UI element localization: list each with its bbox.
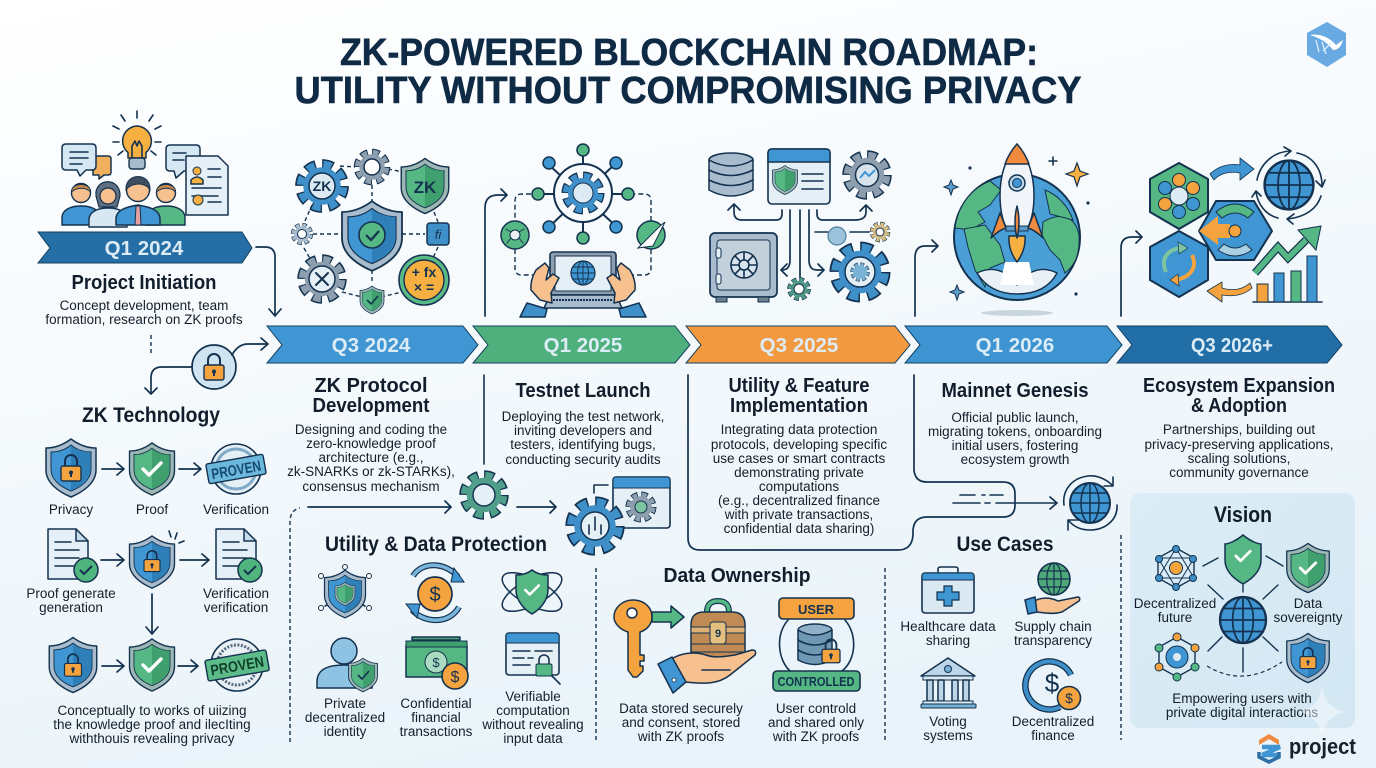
text: ecosystem description: privacy-preserving applications, — [1144, 437, 1334, 452]
text: ecosystem description: Partnerships, building out — [1163, 422, 1315, 437]
text: mainnet description: ecosystem growth — [961, 452, 1069, 467]
icon: ZK protocol gears and shields: fi — [435, 227, 442, 242]
text: utility description: computations — [759, 479, 839, 494]
heading: ZK Protocol Development: ZK Protocol — [314, 375, 428, 397]
icon: healthcare kit — [922, 567, 974, 613]
arrow: to ecosystem illustration — [1121, 231, 1142, 316]
ribbon: Q3 2024 — [267, 326, 478, 363]
heading: Use Cases: Use Cases — [956, 533, 1054, 556]
text: utility description: use cases or smart contracts — [713, 451, 886, 466]
labels: use cases first row: transparency — [1014, 633, 1092, 648]
text: ZK technology caption: Conceptually to works of uiizing — [57, 703, 247, 718]
ribbon: Q3 2024: Q3 2024 — [332, 334, 411, 357]
heading: Ecosystem Expansion and Adoption — [1143, 375, 1335, 417]
title: ZK-POWERED BLOCKCHAIN ROADMAP: — [340, 32, 1038, 74]
text: testnet description: Deploying the test network, — [502, 409, 664, 424]
logo: project: project — [1289, 734, 1357, 759]
text: ZK technology caption: the knowledge proof and ilecIting — [53, 717, 251, 732]
labels: second row: Verification — [203, 586, 269, 601]
labels: utility icons: Private — [324, 696, 366, 711]
ribbon: Q3 2026+ — [1117, 326, 1342, 363]
labels: utility icons: identity — [324, 724, 367, 739]
ribbon: Q1 2024 — [38, 232, 252, 263]
text: protocol description: Designing and coding the — [295, 422, 447, 437]
labels: decentralized future and data sovereignty: future — [1158, 610, 1192, 625]
icon: hand holding globe — [1025, 563, 1080, 614]
labels: data ownership: Data stored securely — [619, 701, 743, 716]
text: utility description: protocols, developing specific — [711, 437, 887, 452]
icon: data protection system — [709, 149, 888, 302]
labels: second row: Proof generate — [26, 586, 116, 601]
panel: Q1 2026 mainnet genesis — [905, 144, 1122, 467]
labels: use cases second row: Decentralized — [1012, 714, 1094, 729]
labels: use cases first row: Supply chain — [1014, 619, 1092, 634]
heading: Utility and Feature Implementation: Utility & Feature — [728, 375, 870, 397]
icon: cash stack — [406, 637, 468, 689]
icon: network hub and laptop — [501, 144, 665, 317]
icon: bank voting building — [921, 658, 976, 708]
labels: data ownership: with ZK proofs — [637, 729, 724, 744]
labels: first row: Privacy — [49, 502, 93, 517]
labels: utility icons: financial — [411, 710, 461, 725]
heading: Utility and Data Protection: Utility & Data Protection — [325, 533, 547, 556]
icon: ZK protocol gears and shields: ZK — [414, 178, 437, 197]
icon row: privacy proof verification — [46, 439, 266, 497]
text: utility description: confidential data sharing) — [724, 521, 874, 536]
icon: sparkle — [1299, 688, 1345, 736]
ribbon: Q3 2025 — [686, 326, 910, 363]
icon row: proof generation — [48, 529, 262, 634]
labels: second row: generation — [39, 600, 103, 615]
title: UTILITY WITHOUT COMPROMISING PRIVACY — [294, 70, 1082, 112]
icon: top right logo — [1307, 22, 1346, 67]
icon: user controlled database — [773, 598, 860, 691]
icon: decentralized network — [1156, 546, 1196, 590]
icon: ring of nodes — [1155, 633, 1199, 681]
connector: utility bracket to globe — [688, 375, 1015, 550]
ribbon: Q3 2025: Q3 2025 — [760, 334, 838, 357]
labels: first row: Proof — [136, 502, 168, 517]
text: mainnet description: Official public launch, — [951, 410, 1079, 425]
arrow: Q1 2024 to Q3 2024 — [256, 247, 281, 316]
text: project initiation description: formation, research on ZK proofs — [45, 312, 243, 327]
heading: Ecosystem Expansion and Adoption: & Adoption — [1191, 395, 1287, 417]
text: testnet description: conducting security audits — [505, 452, 661, 467]
text: utility description: (e.g., decentralized finance — [718, 493, 880, 508]
labels: second row: verification — [204, 600, 268, 615]
ribbon: Q1 2026 — [905, 326, 1122, 363]
panel: Vision — [1130, 493, 1355, 736]
panel: Q1 2025 testnet launch — [473, 144, 690, 467]
text: ecosystem description: community governance — [1169, 465, 1309, 480]
text: utility description: demonstrating private — [734, 465, 864, 480]
text: mainnet description: migrating tokens, onboarding — [928, 424, 1102, 439]
labels: utility icons: Verifiable — [505, 689, 561, 704]
ribbon: Q1 2025: Q1 2025 — [544, 334, 622, 357]
ribbon: Q3 2026+: Q3 2026+ — [1191, 334, 1273, 357]
heading: ZK Protocol Development — [312, 375, 430, 417]
panel: Data Ownership — [614, 564, 864, 744]
labels: decentralized future and data sovereignty: Decentralized — [1134, 596, 1216, 611]
labels: data ownership: and shared only — [768, 715, 864, 730]
text: testnet description: inviting developers and — [514, 423, 652, 438]
text: testnet description: testers, identifying bugs, — [510, 437, 656, 452]
labels: utility icons: decentralized — [305, 710, 385, 725]
panel: Q3 2024 ZK protocol development — [267, 153, 478, 494]
heading: Mainnet Genesis: Mainnet Genesis — [942, 380, 1088, 402]
divider line: testnet — [483, 375, 485, 464]
icon: financial coin cycle: $ — [429, 584, 441, 606]
icon: ZK protocol gears and shields: ZK — [313, 178, 331, 194]
icon row: proven result: PROVEN — [209, 653, 265, 680]
panel: Utility and Data Protection — [305, 533, 584, 746]
labels: data ownership: with ZK proofs — [772, 729, 859, 744]
icon row: privacy proof verification: PROVEN — [210, 458, 262, 483]
icon: user controlled database: USER — [798, 602, 835, 617]
labels: use cases second row: Voting — [929, 714, 967, 729]
icon: ZK protocol gears and shields: × = — [414, 279, 434, 295]
panel: Q3 2026+ ecosystem expansion — [1117, 147, 1342, 480]
heading: Ecosystem Expansion and Adoption: Ecosystem Expansion — [1143, 375, 1335, 397]
text: protocol description: zk-SNARKs or zk-STARKs), — [287, 464, 455, 479]
text: mainnet description: initial users, fostering — [952, 438, 1078, 453]
text: project initiation description: Concept development, team — [60, 298, 228, 313]
labels: use cases second row: finance — [1031, 728, 1075, 743]
icon: person with shield — [317, 638, 378, 692]
panel: Use Cases — [900, 533, 1094, 743]
labels: utility icons: computation — [496, 703, 570, 718]
text: protocol description: zero-knowledge proof — [306, 436, 436, 451]
labels: use cases second row: systems — [923, 728, 973, 743]
text: utility description: with private transactions, — [724, 507, 873, 522]
icon: key, chest and hand — [614, 600, 756, 693]
icon: browser with lock — [506, 633, 560, 684]
icon: decentralized finance coin: $ — [1065, 690, 1073, 706]
labels: use cases first row: sharing — [926, 633, 970, 648]
text: protocol description: consensus mechanism — [302, 479, 440, 494]
ribbon: Q1 2024: Q1 2024 — [105, 237, 184, 260]
icon: user controlled database: CONTROLLED — [778, 674, 854, 689]
text: ZK technology caption: withthouis revealing privacy — [68, 731, 235, 746]
icon: rocket launching from globe — [944, 144, 1090, 316]
labels: utility icons: input data — [503, 731, 563, 746]
logo: project — [1259, 734, 1357, 762]
icon: private decentralized identity shield — [318, 564, 372, 618]
icon: ZK protocol gears and shields — [293, 153, 449, 314]
icon: financial coin cycle — [406, 565, 464, 620]
icon: cash stack: $ — [432, 655, 440, 670]
title — [294, 32, 1082, 112]
icon row: proven result — [49, 637, 269, 693]
labels: utility icons: Confidential — [400, 696, 472, 711]
text: vision caption: Empowering users with — [1172, 691, 1312, 706]
labels: utility icons: transactions — [400, 724, 473, 739]
icon: team brainstorming — [62, 111, 228, 227]
heading: ZK Protocol Development: Development — [312, 395, 430, 417]
vision background — [1130, 493, 1355, 728]
labels: decentralized future and data sovereignty: Data — [1294, 596, 1323, 611]
labels: use cases first row: Healthcare data — [900, 619, 996, 634]
text: utility description: Integrating data protection — [721, 422, 877, 437]
icon: ZK protocol gears and shields: + fx — [412, 264, 436, 280]
heading: ZK Technology: ZK Technology — [82, 404, 220, 427]
arrow: to rocket illustration — [915, 240, 938, 316]
icon: decentralized finance coin: $ — [1045, 668, 1060, 698]
labels: data ownership: User controld — [776, 701, 856, 716]
heading: Testnet Launch: Testnet Launch — [516, 380, 650, 402]
labels: first row: Verification — [203, 502, 269, 517]
text: protocol description: architecture (e.g., — [318, 450, 424, 465]
icon: ecosystem hexagons globe and growth chart — [1150, 147, 1325, 302]
heading: Project Initiation: Project Initiation — [72, 272, 216, 294]
icon: cash stack: $ — [451, 669, 460, 686]
icon: globe with rotating arrows and connector — [953, 476, 1117, 530]
ribbon: Q1 2026: Q1 2026 — [976, 334, 1054, 357]
icon: key, chest and hand: 9 — [715, 628, 721, 640]
labels: decentralized future and data sovereignty: sovereignty — [1273, 610, 1343, 625]
panel: ZK Technology — [26, 404, 269, 746]
heading: Data Ownership: Data Ownership — [664, 564, 810, 587]
connector: gears row — [290, 475, 670, 742]
heading: Vision: Vision — [1214, 502, 1272, 527]
heading: Utility and Feature Implementation: Implementation — [730, 395, 868, 417]
labels: utility icons: without revealing — [481, 717, 584, 732]
icon: padlock connector — [145, 335, 268, 394]
panel: Q1 2024 project initiation — [38, 111, 252, 327]
text: ecosystem description: scaling solutions, — [1188, 451, 1290, 466]
icon: atom shield — [497, 565, 567, 619]
ribbon: Q1 2025 — [473, 326, 690, 363]
labels: data ownership: and consent, stored — [622, 715, 740, 730]
panel: Q3 2025 utility and feature implementation — [686, 149, 910, 536]
heading: Utility and Feature Implementation — [728, 375, 870, 417]
text: vision caption: private digital interactions — [1166, 705, 1318, 720]
diagram: vision network — [1203, 535, 1329, 683]
arrow: to testnet illustration — [485, 189, 507, 316]
icon: decentralized finance coin — [1025, 661, 1080, 710]
